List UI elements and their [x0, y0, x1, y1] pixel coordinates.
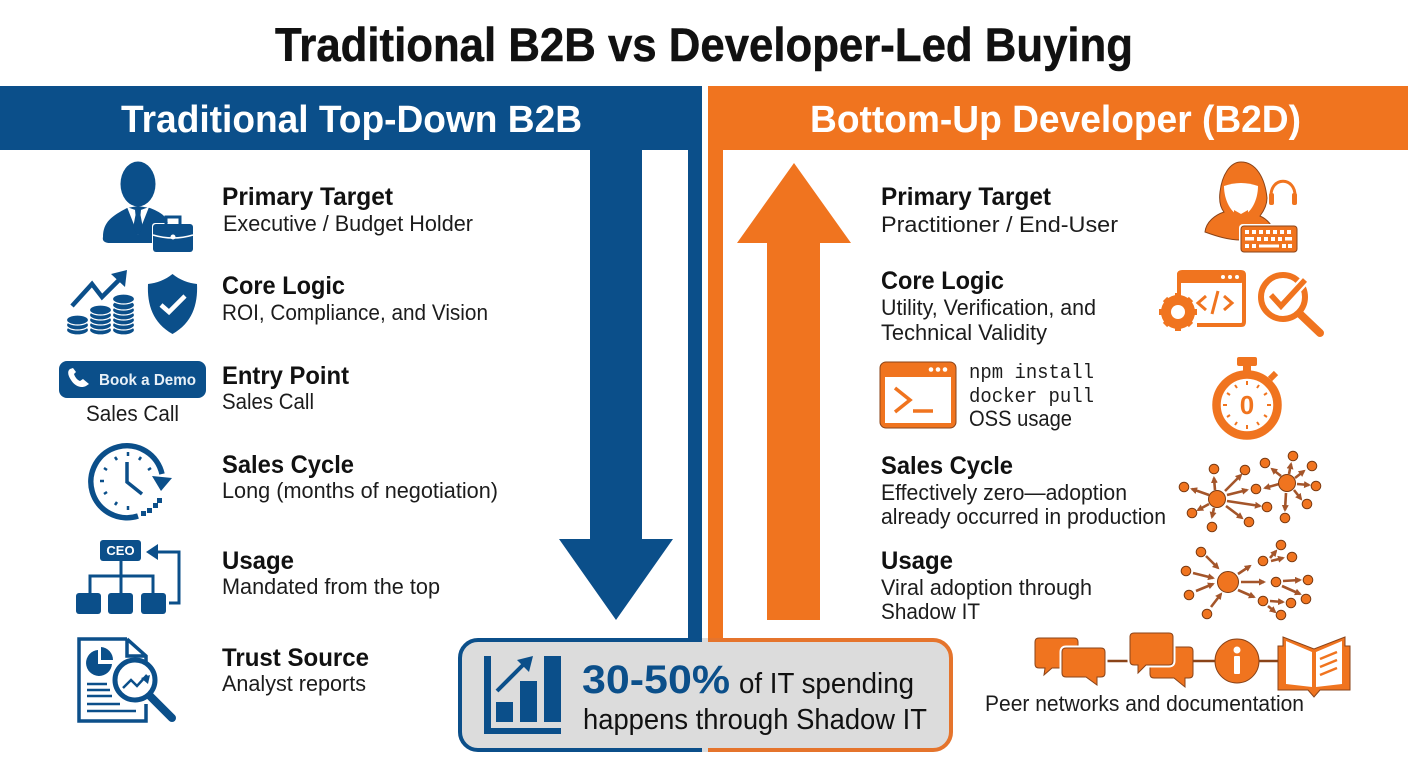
usage text: Shadow IT: [881, 599, 980, 624]
icon: terminal window: [880, 362, 956, 428]
core logic text: Technical Validity: [881, 320, 1047, 345]
left panel header: [0, 86, 702, 150]
button: book a demo: Book a Demo: [99, 372, 196, 389]
entry point commands: docker pull: [969, 386, 1094, 409]
icon: CEO org chart: [76, 540, 179, 614]
icon: CEO org chart: CEO: [106, 543, 135, 558]
icon: magnifier with check: [1261, 275, 1320, 333]
primary target text: [881, 183, 1118, 237]
icon: analyst report with magnifier: [79, 639, 172, 721]
callout: shadow IT statistic: [458, 638, 953, 752]
arrow: downward blue: [559, 150, 673, 620]
icon: code window with gear: [1159, 271, 1244, 331]
right panel edge strip: [708, 150, 723, 642]
usage text: [222, 547, 440, 599]
right panel header: [708, 86, 1408, 150]
title: Traditional B2B vs Developer-Led Buying: [275, 18, 1133, 71]
core logic text: Core Logic: [881, 267, 1004, 295]
left panel edge strip: [688, 150, 702, 642]
trust source text: Trust Source: [222, 644, 369, 672]
primary target text: [222, 183, 473, 236]
panel: bottom-up developer B2D: [708, 86, 1408, 716]
primary target text: Executive / Budget Holder: [223, 211, 473, 236]
core logic text: Utility, Verification, and: [881, 295, 1096, 320]
entry point commands: [969, 362, 1094, 431]
core logic text: [222, 272, 488, 325]
sales cycle text: Sales Cycle: [881, 452, 1013, 480]
core logic text: [881, 267, 1096, 345]
icon: shield with check: [148, 274, 197, 334]
statistic text: [582, 658, 927, 736]
statistic text: happens through Shadow IT: [583, 704, 927, 736]
usage text: Mandated from the top: [222, 574, 440, 599]
icon: clock with arrow: [91, 446, 172, 518]
panel: traditional top-down B2B: [0, 86, 702, 721]
left panel header: Traditional Top-Down B2B: [121, 99, 582, 141]
icon: stopwatch at zero: 0: [1240, 390, 1254, 420]
right panel header: Bottom-Up Developer (B2D): [810, 99, 1301, 141]
primary target text: Practitioner / End-User: [881, 212, 1118, 237]
icon: network spread: [1179, 451, 1321, 532]
icon: stopwatch at zero: [1216, 357, 1278, 436]
sales cycle text: Sales Cycle: [222, 451, 354, 479]
sales call caption: Sales Call: [86, 401, 179, 426]
statistic text: of IT spending: [739, 668, 914, 700]
usage text: Usage: [222, 547, 294, 575]
core logic text: Core Logic: [222, 272, 345, 300]
arrow: upward orange: [737, 163, 851, 620]
core logic text: ROI, Compliance, and Vision: [222, 300, 488, 325]
entry point commands: npm install: [969, 362, 1094, 385]
usage text: Viral adoption through: [881, 575, 1092, 600]
primary target text: Primary Target: [881, 183, 1052, 211]
entry point text: Sales Call: [222, 389, 314, 414]
sales cycle text: [881, 452, 1166, 529]
icon: viral adoption network: [1181, 540, 1313, 620]
icon: coins and growth arrow: [66, 270, 134, 335]
trust source text: [222, 644, 369, 696]
entry point commands: OSS usage: [969, 406, 1072, 431]
entry point text: Entry Point: [222, 362, 350, 390]
statistic text: 30-50%: [582, 658, 730, 702]
trust source text: Peer networks and documentation: [985, 691, 1304, 716]
sales cycle text: Effectively zero—adoption: [881, 480, 1127, 505]
button: book a demo: [59, 361, 206, 398]
primary target text: Primary Target: [222, 183, 394, 211]
icon: executive with briefcase: [103, 162, 194, 253]
sales cycle text: already occurred in production: [881, 504, 1166, 529]
usage text: Usage: [881, 547, 953, 575]
icon: rising bar chart: [484, 656, 561, 734]
trust source text: Analyst reports: [222, 671, 366, 696]
sales cycle text: Long (months of negotiation): [222, 478, 498, 503]
usage text: [881, 547, 1092, 624]
icon: hooded developer with keyboard and headset: [1205, 162, 1299, 254]
entry point text: [222, 362, 350, 414]
sales cycle text: [222, 451, 498, 503]
icon: peer chat, info and documentation chain: [1035, 633, 1350, 697]
